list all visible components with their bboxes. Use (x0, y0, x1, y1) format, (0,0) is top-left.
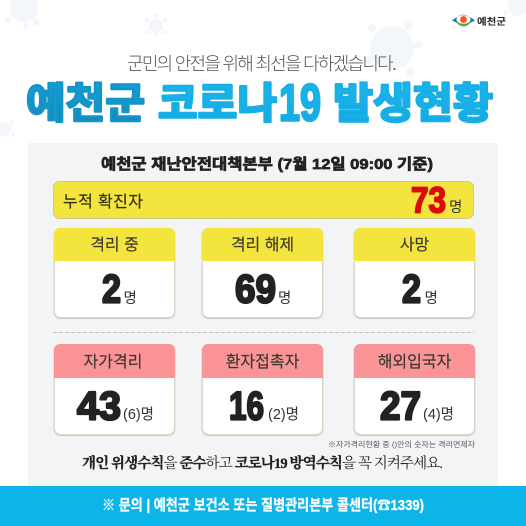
title: 발생현황 (333, 80, 493, 127)
cumulative confirmed bar: 누적 확진자 (63, 193, 143, 211)
card: released: 69 (235, 268, 276, 312)
card: patient contacts: (2)명 (268, 406, 299, 423)
card: released: 명 (278, 290, 291, 307)
card: released: 격리 해제 (231, 236, 294, 254)
subtitle: 군민의 안전을 위해 최선을 다하겠습니다. (127, 54, 397, 74)
footnote: ※자가격리현황 중 ()안의 숫자는 격리면제자 (328, 439, 475, 449)
cumulative confirmed bar: 명 (449, 199, 462, 216)
footer bar (0, 486, 526, 526)
card: patient contacts (202, 344, 323, 434)
title: 19 (279, 74, 321, 132)
card: self-quarantine: 43 (77, 384, 121, 428)
cumulative confirmed bar: 73 (411, 180, 446, 220)
card: self-quarantine (54, 344, 175, 434)
card: in isolation: 2 (102, 268, 121, 312)
contact text: ※ 문의 | 예천군 보건소 또는 질병관리본부 콜센터(☎1339) (102, 497, 424, 514)
card: deaths: 사망 (400, 236, 429, 254)
decorative virus shapes (0, 0, 526, 136)
card: deaths: 명 (424, 290, 438, 307)
panel: status board (28, 143, 498, 486)
card: overseas arrivals (354, 344, 475, 434)
title (26, 74, 493, 132)
title: 예천군 (26, 80, 145, 127)
logo: Yecheon-gun (452, 15, 506, 28)
card: overseas arrivals: 27 (380, 384, 421, 428)
card: overseas arrivals: (4)명 (423, 406, 454, 423)
card: in isolation: 격리 중 (90, 236, 139, 254)
panel heading: 예천군 재난안전대책본부 (7월 12일 09:00 기준) (101, 156, 433, 173)
card: in isolation (54, 228, 175, 318)
logo wordmark: 예천군 (477, 16, 506, 28)
hygiene message: 개인 위생수칙을 준수하고 코로나19 방역수칙을 꼭 지켜주세요. (82, 454, 443, 472)
title: 코로나 (158, 80, 277, 127)
card: overseas arrivals: 해외입국자 (378, 353, 452, 371)
cumulative confirmed bar (54, 180, 474, 220)
card: self-quarantine: 자가격리 (84, 353, 142, 371)
card: in isolation: 명 (124, 290, 137, 307)
card: deaths: 2 (402, 268, 421, 312)
card: patient contacts: 환자접촉자 (226, 353, 300, 371)
card: self-quarantine: (6)명 (123, 406, 154, 423)
card: released (202, 228, 323, 318)
card: patient contacts: 16 (229, 384, 264, 428)
card: deaths (354, 228, 475, 318)
